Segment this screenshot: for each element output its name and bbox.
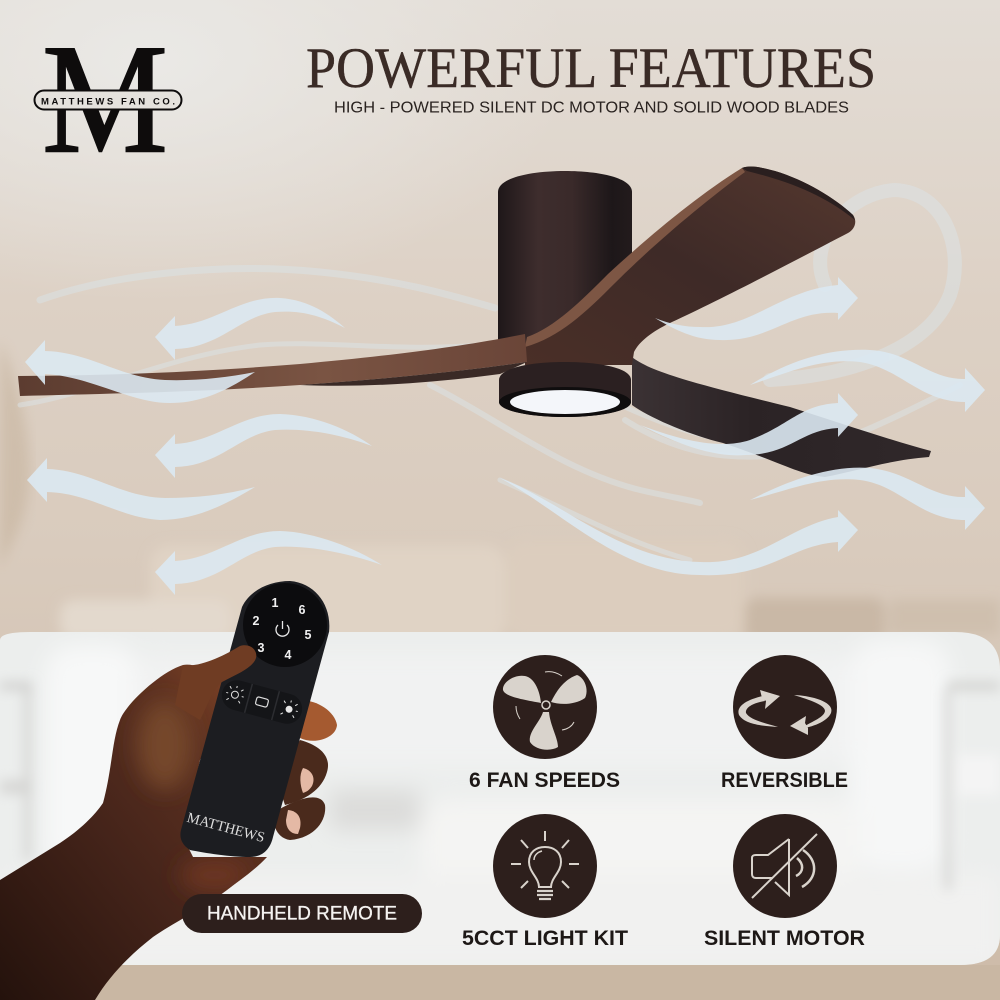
air flow arrows	[25, 277, 985, 595]
feature: 5cct light kit	[462, 814, 628, 950]
speed dial	[243, 583, 327, 667]
pill: handheld remote	[182, 894, 422, 933]
motor housing	[498, 171, 632, 345]
faint air swirls	[20, 190, 960, 560]
light housing	[499, 362, 631, 417]
lower blade	[632, 357, 931, 477]
panel: features	[0, 625, 1000, 970]
feature: 5cct light kit: 5CCT LIGHT KIT	[462, 926, 628, 950]
ceiling fan	[18, 167, 931, 477]
feature: 6 fan speeds	[469, 655, 620, 792]
fingernail lower	[286, 810, 300, 834]
title: POWERFUL FEATURES	[306, 37, 876, 100]
fingernail upper	[300, 768, 314, 793]
icon: fan	[503, 672, 587, 750]
arrow left 3	[155, 531, 382, 595]
LED light	[510, 390, 620, 414]
hand holding remote	[0, 581, 337, 1000]
speed numbers: 2	[253, 614, 260, 628]
remote control	[180, 581, 329, 857]
arrow far left 2	[27, 458, 255, 520]
feature: silent motor	[704, 814, 865, 950]
speed numbers: 1	[272, 596, 279, 610]
speed numbers	[253, 596, 312, 662]
feature: reversible	[721, 655, 848, 792]
arrow far right 1	[750, 350, 985, 412]
remote brand: MATTHEWS	[185, 810, 266, 846]
fingers	[274, 700, 337, 840]
sofa behind panel	[60, 540, 1000, 645]
power button	[276, 621, 289, 636]
arrow far right 2	[750, 468, 985, 530]
upper blade	[525, 167, 855, 365]
arrow right 3	[500, 478, 858, 575]
speed numbers: 6	[299, 603, 306, 617]
arrow left 1	[155, 298, 345, 360]
logo: Matthews Fan Co.: MATTHEWS FAN CO.	[41, 96, 175, 108]
upper blade top edge	[742, 167, 855, 220]
feature: reversible: REVERSIBLE	[721, 768, 848, 792]
arrow right 2	[640, 393, 858, 455]
palm and forearm	[0, 665, 267, 1000]
left blade	[18, 334, 527, 396]
feature: silent motor: SILENT MOTOR	[704, 926, 865, 950]
plant silhouette	[0, 340, 30, 570]
arrow left 2	[155, 414, 372, 478]
speed numbers: 5	[305, 628, 312, 642]
arrow right 1	[655, 277, 858, 340]
icon: muted speaker	[752, 834, 817, 898]
icon: light bulb	[511, 831, 579, 899]
feature: 6 fan speeds: 6 FAN SPEEDS	[469, 768, 620, 792]
speed numbers: 3	[258, 641, 265, 655]
function buttons	[219, 677, 305, 727]
pill: handheld remote: HANDHELD REMOTE	[207, 904, 397, 924]
left blade underside	[300, 362, 527, 386]
icon: reverse arrows	[738, 690, 832, 735]
speed numbers: 4	[285, 648, 292, 662]
subtitle: HIGH - POWERED SILENT DC MOTOR AND SOLID WOOD BLADES	[334, 100, 849, 116]
logo: Matthews Fan Co.: M	[42, 12, 168, 186]
upper blade side edge	[525, 168, 745, 347]
arrow far left 1	[25, 340, 255, 403]
thumb	[175, 645, 256, 720]
